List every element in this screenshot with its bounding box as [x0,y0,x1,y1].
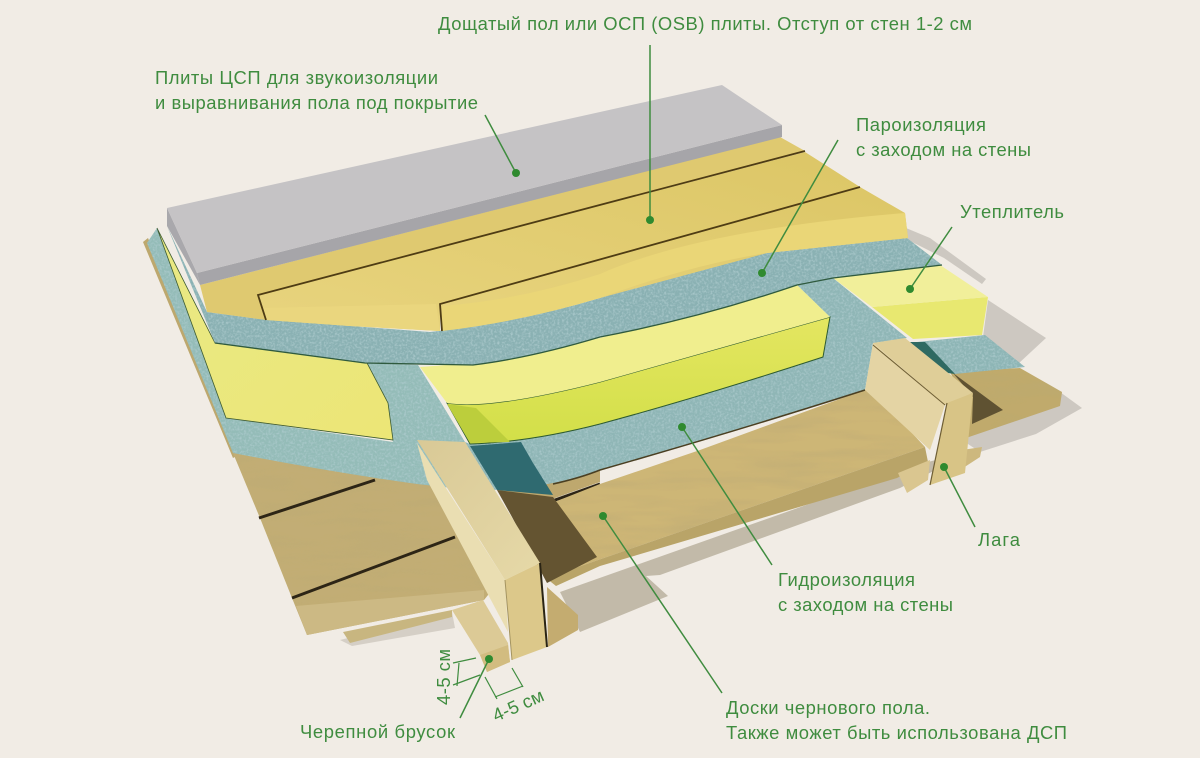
insulation: left block [157,228,393,440]
OSB board 1 [200,137,805,320]
insulation: central block [420,285,830,444]
hydro: dark lower edge [553,390,865,484]
hydro: left sheet [147,228,470,490]
left joist with cranial bar [417,440,578,672]
cranial bar front [452,600,510,672]
dimension: bar width: 4-5 см [489,685,547,726]
dimension: bar height: 4-5 см [433,649,454,705]
shadow on central sheet [470,442,553,495]
joist end face [930,393,973,485]
boards: left group [233,453,492,635]
callout: CSP slabs: Плиты ЦСП для звукоизоляции [155,67,438,88]
board: lower front edge [296,590,484,635]
OSB floor boards [200,137,908,331]
strip: subfloor edge seen at the left [143,238,238,458]
right joist with cranial bars [865,338,982,493]
insulation: right block [833,265,988,339]
OSB board 2 [258,152,860,331]
callout: CSP slabs: и выравнивания пола под покрытие [155,92,478,113]
callout: OSB floor: Дощатый пол или ОСП (OSB) плиты. Отступ от стен 1-2 см [438,13,972,34]
joist end face [505,563,547,660]
callout: subfloor boards [599,512,1067,743]
board: under piece [343,610,452,643]
vapor barrier layer [167,226,942,365]
callout: waterproofing: Гидроизоляция [778,569,915,590]
cast shadows on the ground [340,228,1082,646]
CSP gray slab [167,85,782,285]
callout: CSP slabs [155,67,520,177]
callout: OSB floor [438,13,972,224]
joist top face [417,440,540,580]
callout: cranial bar: Черепной брусок [300,721,456,742]
callout: joist: Лага [978,529,1021,550]
callout: vapor barrier: Пароизоляция [856,114,986,135]
dimension: bar width [485,668,547,726]
callout: waterproofing: с заходом на стены [778,594,953,615]
cranial bar back [960,447,982,470]
cranial bar behind [547,587,578,647]
callout: subfloor boards: Также может быть использована ДСП [726,722,1067,743]
joist side face [417,443,508,632]
callout: insulation [906,201,1064,293]
board: central wide [514,388,925,578]
cranial bar front [898,460,930,493]
hydro: right sheet [917,335,1025,374]
OSB board 3 [440,187,908,331]
callout: insulation: Утеплитель [960,201,1064,222]
callout: vapor barrier [758,114,1031,277]
joist top strip [873,338,973,405]
callout: cranial bar [300,655,493,742]
callout: vapor barrier: с заходом на стены [856,139,1031,160]
OSB board gaps [258,151,860,331]
shadow from left lag [497,490,597,583]
hydro: central sheet [465,278,907,490]
waterproofing layer [147,228,1025,495]
dimension: bar height [433,649,480,705]
subfloor boards [143,238,1062,643]
callout: subfloor boards: Доски чернового пола. [726,697,930,718]
callout: joist [940,463,1021,550]
callout: waterproofing [678,423,953,615]
board: central wide front edge [546,447,928,586]
board: between lag and central board [497,466,600,513]
joist side face [865,343,945,450]
board: back right [950,368,1062,438]
board gaps [259,480,600,598]
